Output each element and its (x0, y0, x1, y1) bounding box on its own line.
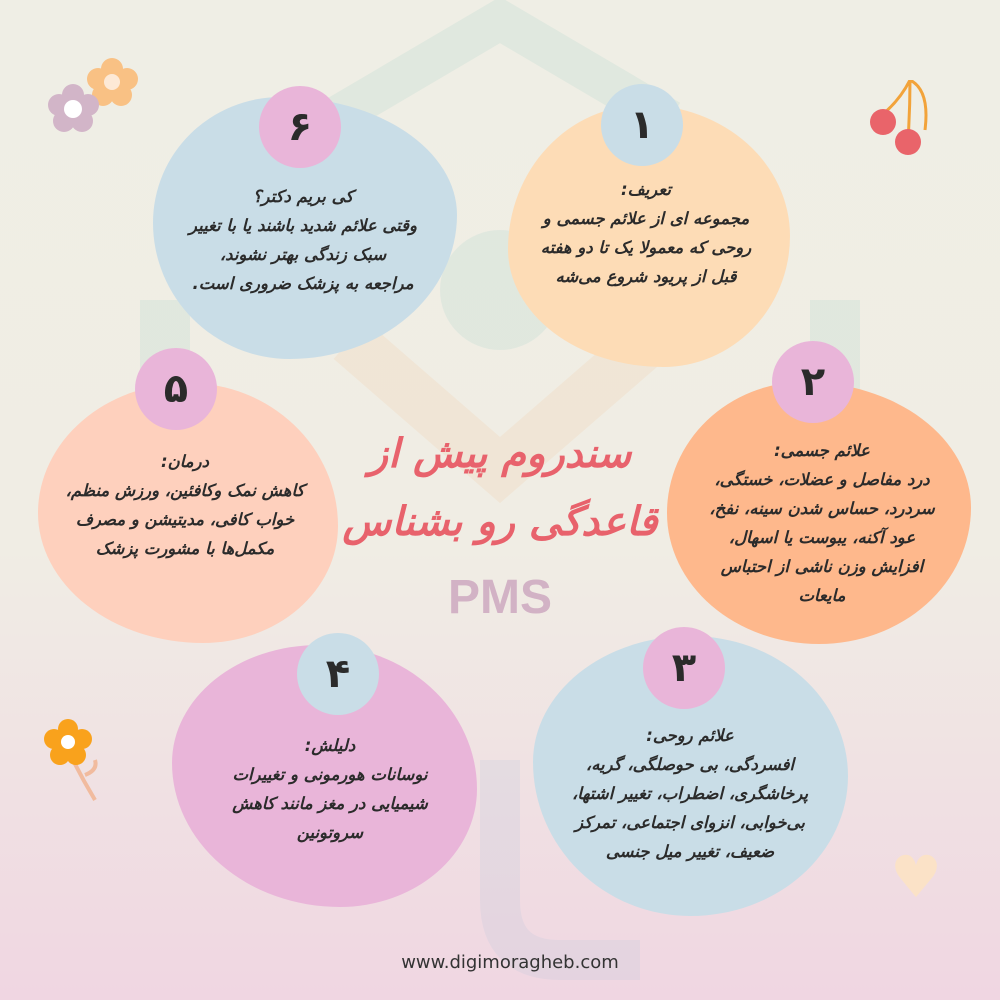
text 4: نوسانات هورمونی و تغییرات (233, 765, 427, 784)
text 6 (186, 187, 417, 294)
icon: heart: ♥ (890, 843, 942, 911)
icon: cherries (870, 80, 928, 155)
text 4: سروتونین (297, 823, 363, 842)
text 6: کی بریم دکتر؟ (253, 187, 353, 206)
badge 2 (772, 341, 854, 423)
text 2 (709, 441, 936, 605)
text 1: مجموعه ای از علائم جسمی و (543, 209, 749, 228)
text 1: روحی که معمولا یک تا دو هفته (541, 238, 751, 257)
badge 5 (135, 348, 217, 430)
blob 4 (172, 645, 477, 907)
icon: flowers top-left (48, 58, 138, 132)
badge 5: ۵ (164, 366, 188, 412)
badge 6: ۶ (288, 104, 312, 150)
text 4: شیمیایی در مغز مانند کاهش (232, 794, 428, 813)
text 2: مایعات (798, 586, 845, 605)
badge 6 (259, 86, 341, 168)
text 2: درد مفاصل و عضلات، خستگی، (714, 470, 930, 489)
badge 4 (297, 633, 379, 715)
footer url: www.digimoragheb.com (401, 952, 619, 973)
text 1: قبل از پریود شروع می‌شه (555, 267, 737, 286)
blob 3 (533, 636, 848, 916)
title: سندروم پیش از (369, 431, 631, 477)
badge 1: ۱ (630, 102, 654, 148)
badge 2: ۲ (801, 359, 825, 405)
text 3: پرخاشگری، اضطراب، تغییر اشتها، (572, 784, 808, 803)
text 5 (66, 452, 308, 558)
blob 1 (508, 105, 790, 367)
text 3: علائم روحی: (646, 726, 734, 745)
blob 2 (667, 382, 971, 644)
text 6: وقتی علائم شدید باشند یا با تغییر (189, 216, 417, 235)
blob 6 (153, 97, 457, 359)
text 4: دلیلش: (305, 736, 355, 755)
badge 1 (601, 84, 683, 166)
icon: flower left (44, 719, 98, 801)
title: قاعدگی رو بشناس (343, 499, 657, 545)
text 2: عود آکنه، یبوست یا اسهال، (729, 528, 915, 547)
blob 5 (38, 383, 338, 643)
text 6: مراجعه به پزشک ضروری است. (192, 274, 414, 293)
text 1 (540, 180, 752, 286)
text 2: علائم جسمی: (774, 441, 870, 460)
text 6: سبک زندگی بهتر نشوند، (220, 245, 386, 264)
text 5: درمان: (161, 452, 209, 471)
text 1: تعریف: (621, 180, 671, 199)
subtitle PMS: PMS (448, 571, 552, 624)
text 5: مکمل‌ها با مشورت پزشک (96, 539, 274, 558)
text 3: ضعیف، تغییر میل جنسی (606, 842, 774, 861)
text 3: بی‌خوابی، انزوای اجتماعی، تمرکز (575, 813, 805, 832)
title (343, 431, 660, 546)
badge 4: ۴ (326, 651, 350, 697)
text 2: سردرد، حساس شدن سینه، نفخ، (709, 499, 935, 518)
text 5: کاهش نمک وکافئین، ورزش منظم، (66, 481, 304, 500)
text 5: خواب کافی، مدیتیشن و مصرف (76, 510, 294, 529)
text 3 (572, 726, 808, 862)
text 4 (232, 736, 428, 842)
text 3: افسردگی، بی حوصلگی، گریه، (586, 755, 794, 774)
text 2: افزایش وزن ناشی از احتباس (721, 557, 923, 576)
badge 3 (643, 627, 725, 709)
badge 3: ۳ (672, 645, 696, 691)
